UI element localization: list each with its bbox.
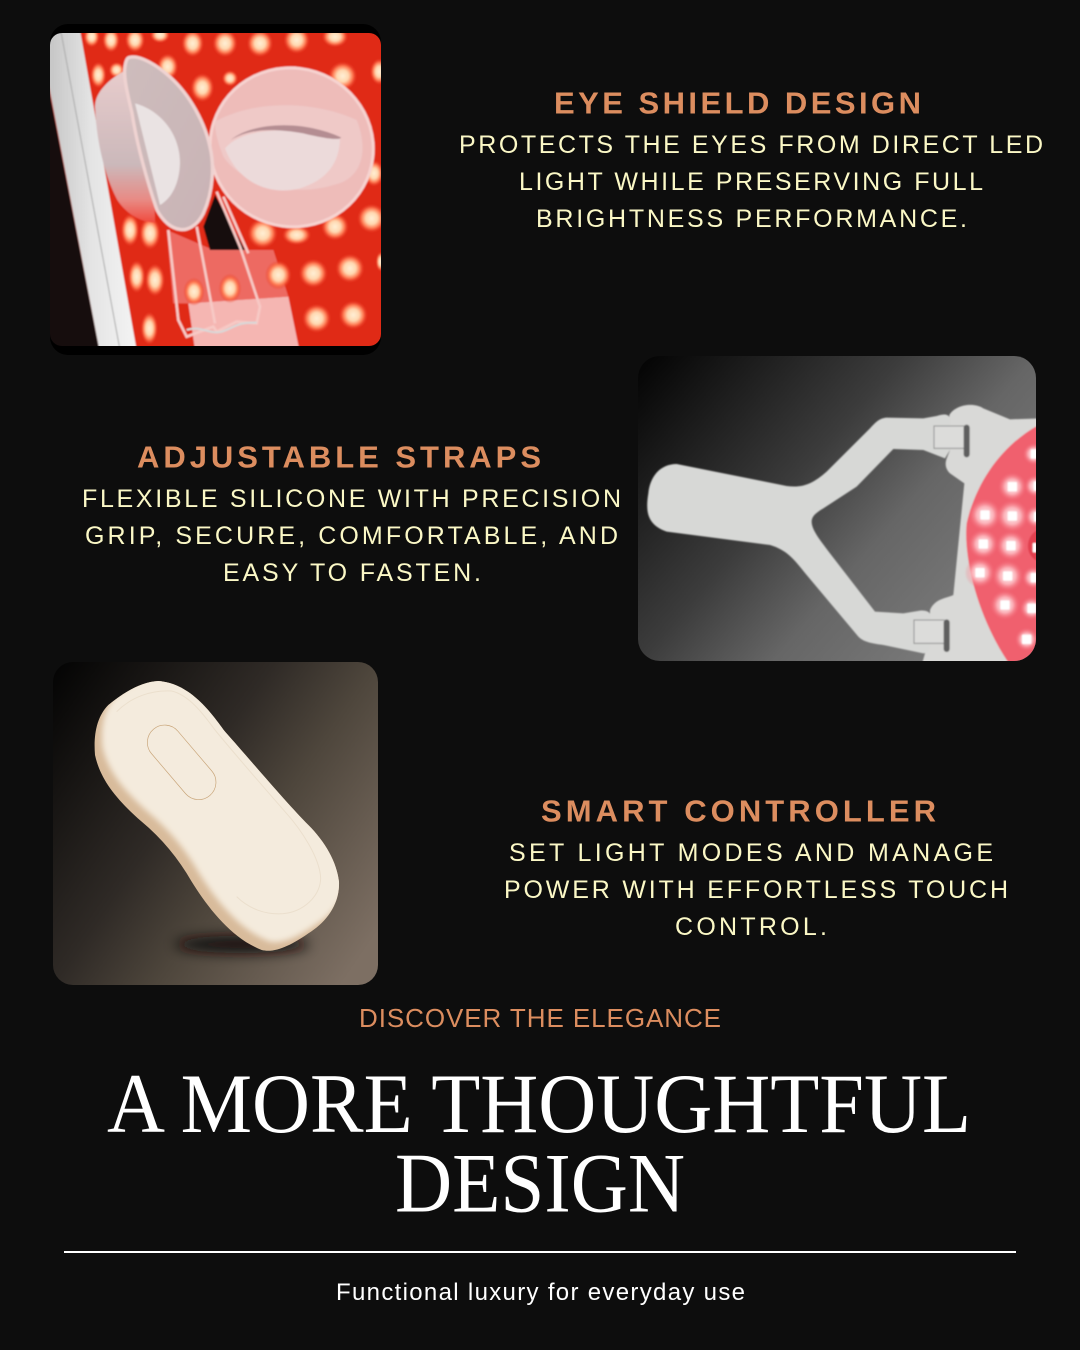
controller body xyxy=(88,672,346,955)
feature text: eye shield design: PROTECTS THE EYES FROM DIRECT LED xyxy=(459,131,1043,159)
feature text: adjustable straps xyxy=(82,440,621,587)
controller shadow xyxy=(175,936,308,953)
divider rule xyxy=(64,1251,1016,1253)
feature text: adjustable straps: FLEXIBLE SILICONE WITH PRECISION xyxy=(82,485,621,513)
feature text: smart controller xyxy=(504,794,1008,941)
tagline: Functional luxury for everyday use xyxy=(336,1279,745,1306)
LED squares xyxy=(966,444,1036,650)
wires xyxy=(168,192,260,337)
feature text: adjustable straps: GRIP, SECURE, COMFORTABLE, AND xyxy=(85,522,618,550)
feature text: adjustable straps: EASY TO FASTEN. xyxy=(223,559,481,587)
mask edge xyxy=(922,405,1042,665)
left eye cup dome xyxy=(95,70,155,223)
main title: A MORE THOUGHTFUL xyxy=(107,1057,971,1151)
feature text: adjustable straps: ADJUSTABLE STRAPS xyxy=(137,440,541,474)
eyebrow heading: DISCOVER THE ELEGANCE xyxy=(359,1003,721,1033)
main title xyxy=(107,1057,971,1230)
feature text: smart controller: CONTROL. xyxy=(675,913,827,941)
feature text: smart controller: SET LIGHT MODES AND MANAGE xyxy=(509,839,993,867)
right eye cup xyxy=(208,65,376,230)
feature text: eye shield design: EYE SHIELD DESIGN xyxy=(554,86,921,120)
feature text: eye shield design: BRIGHTNESS PERFORMANCE. xyxy=(536,205,967,233)
panel: smart controller photo xyxy=(53,662,378,985)
pink nose panel xyxy=(167,230,288,303)
left eye cup rim xyxy=(125,57,212,230)
strap xyxy=(647,415,950,653)
LED dots xyxy=(84,26,389,345)
dark slit xyxy=(203,195,245,250)
red LED face xyxy=(966,423,1042,665)
feature text: eye shield design xyxy=(459,86,1043,233)
left eye cup inner lens xyxy=(135,103,180,205)
feature text: eye shield design: LIGHT WHILE PRESERVING FULL xyxy=(519,168,983,196)
panel: eye shield photo xyxy=(47,24,396,355)
panel: adjustable straps photo xyxy=(638,356,1047,665)
top face inset line xyxy=(117,691,321,914)
feature text: smart controller: SMART CONTROLLER xyxy=(541,794,936,828)
buckles xyxy=(934,426,964,448)
button outline xyxy=(147,724,216,800)
feature text: smart controller: POWER WITH EFFORTLESS TOUCH xyxy=(504,876,1008,904)
device frame xyxy=(47,30,137,350)
main title: DESIGN xyxy=(395,1136,685,1230)
